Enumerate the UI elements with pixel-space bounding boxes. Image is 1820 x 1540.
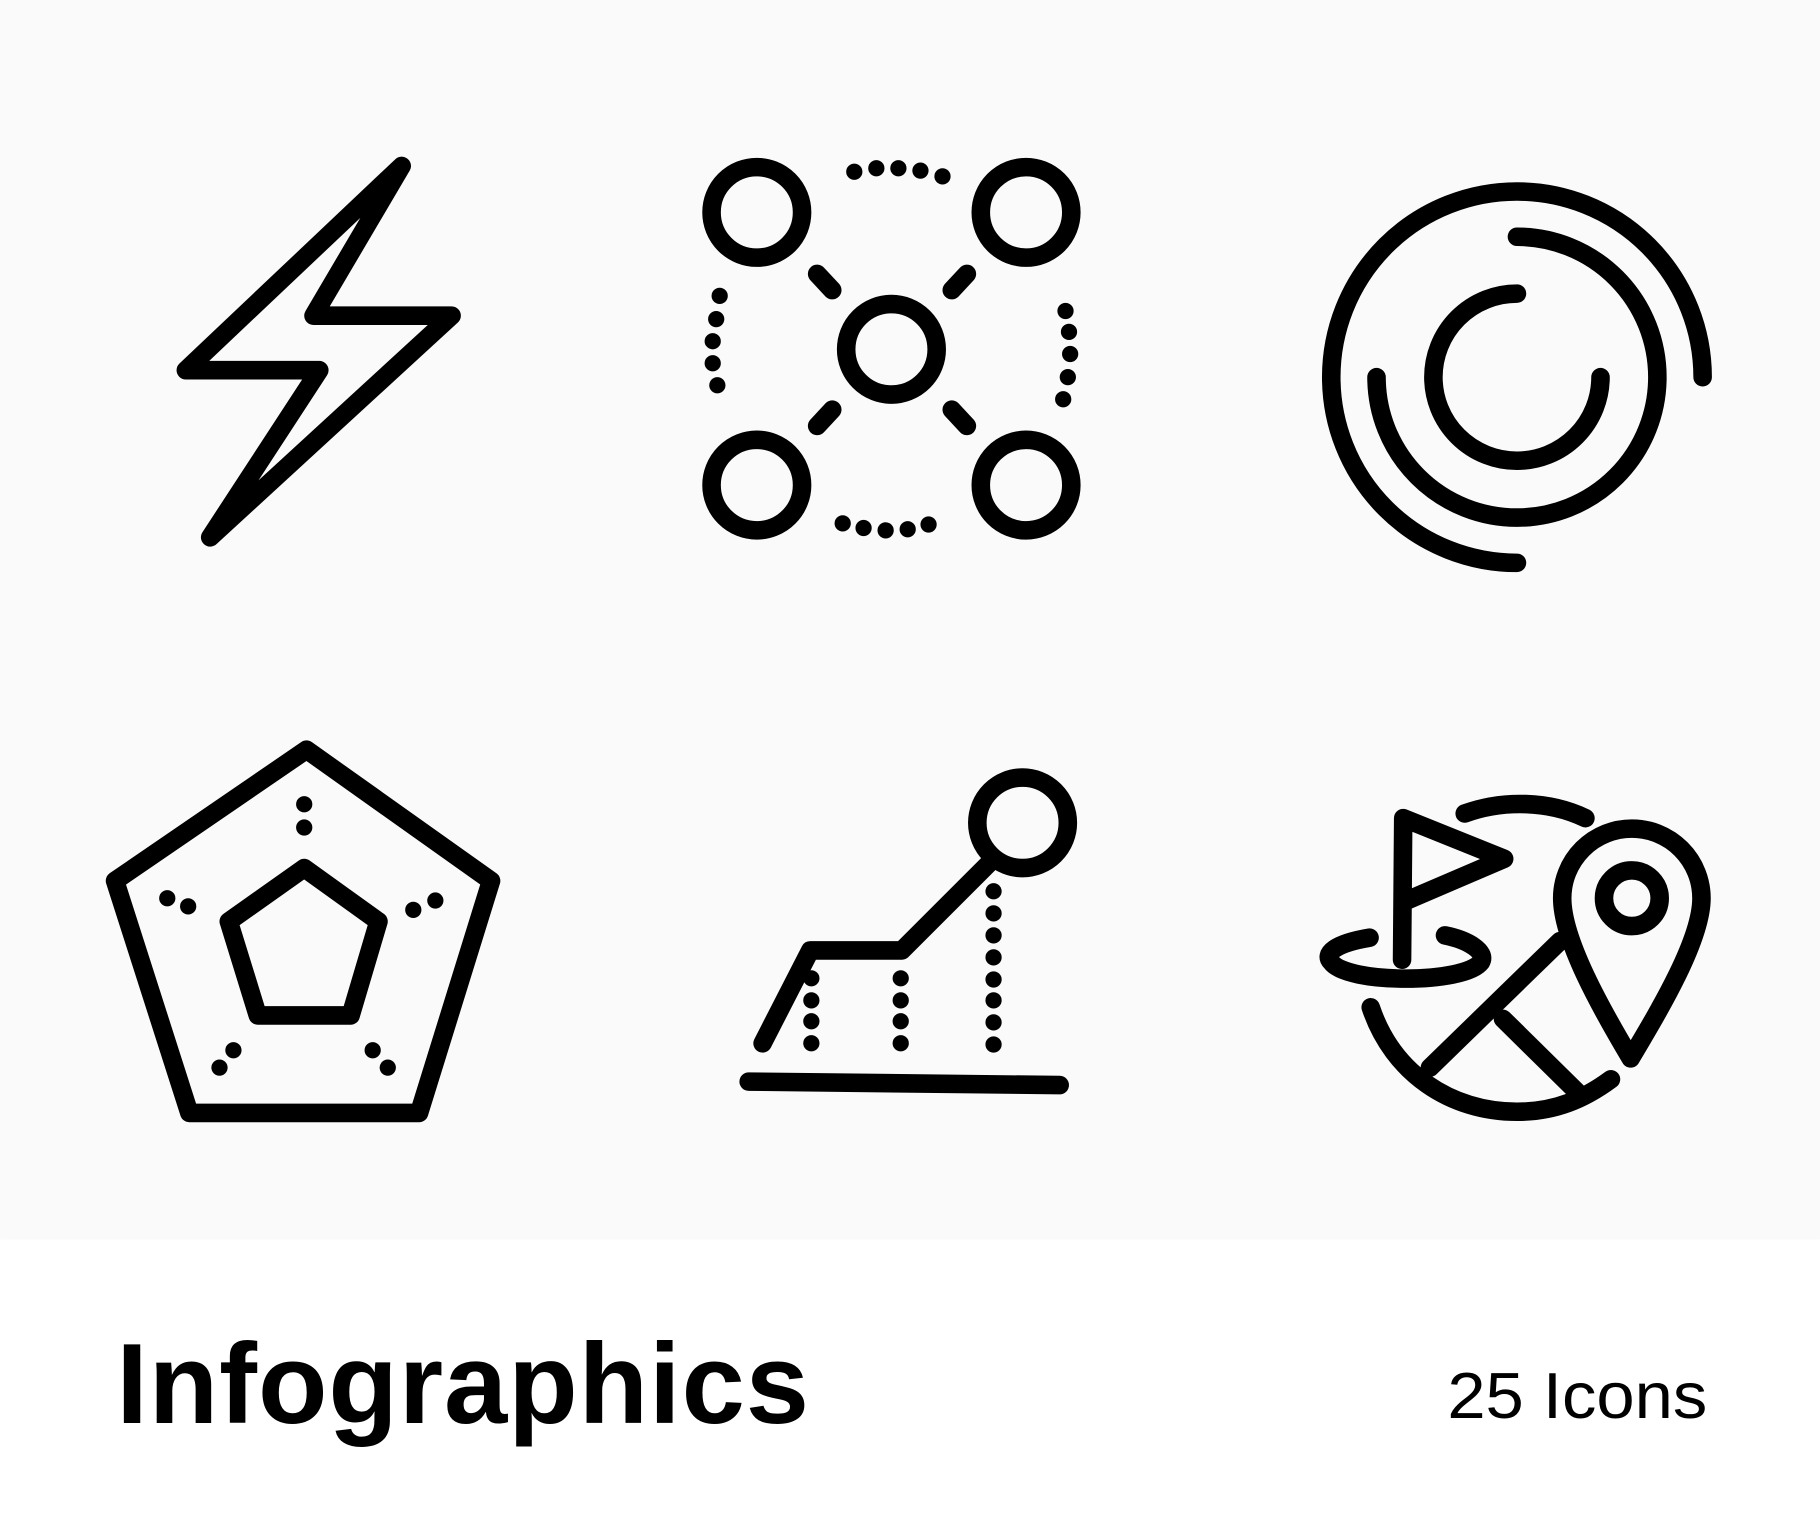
icon: pentagon radar — [115, 750, 491, 1113]
title: Infographics — [116, 1321, 809, 1448]
icon: globe with flag and pin — [1329, 804, 1701, 1112]
icon: lightning bolt — [186, 166, 452, 537]
icon: growth chart — [749, 778, 1068, 1085]
subtitle: icon count: 25 Icons — [1447, 1359, 1707, 1432]
icon: spiral rings — [1331, 191, 1703, 563]
icon: network nodes — [705, 160, 1078, 538]
